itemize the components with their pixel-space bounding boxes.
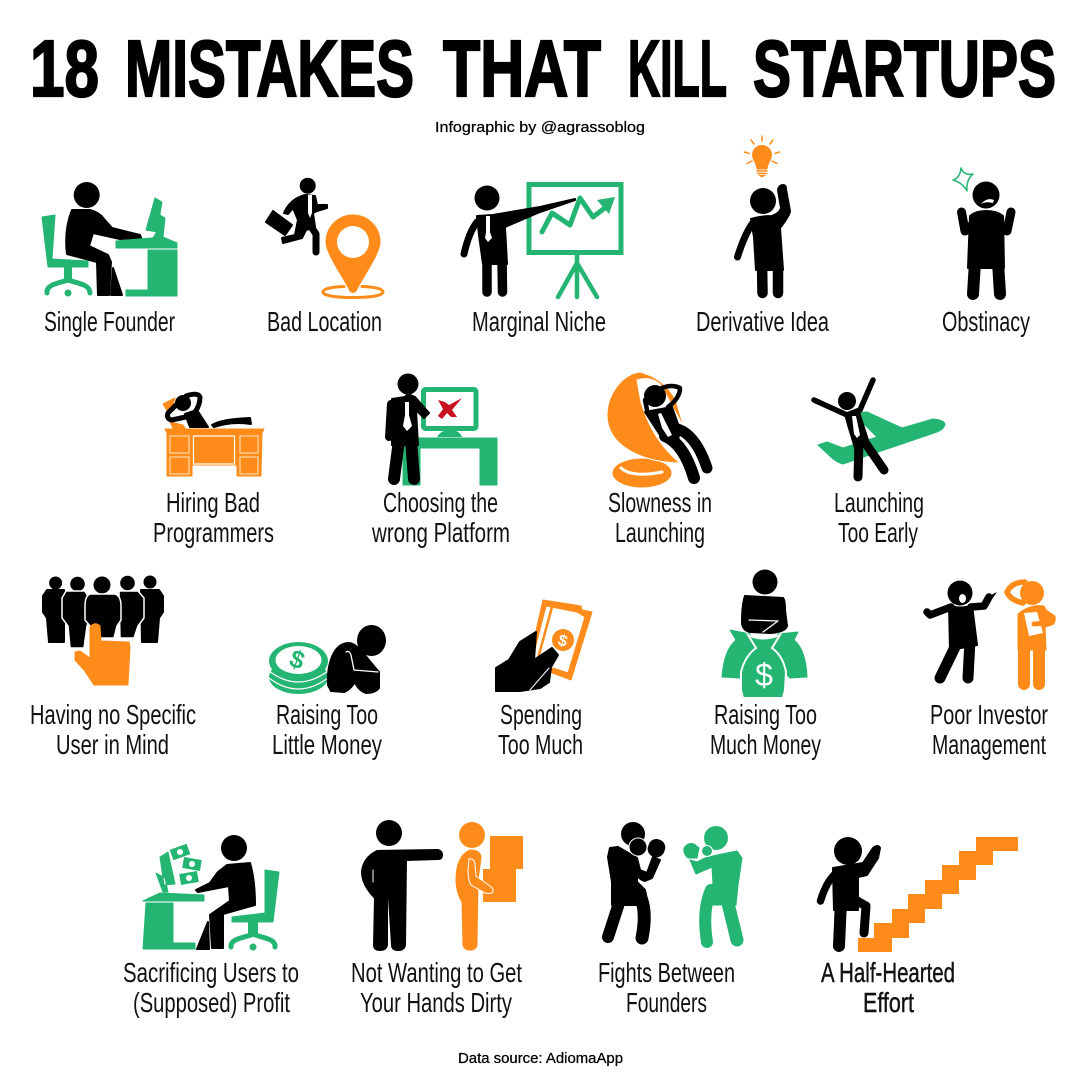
label: Your Hands Dirty (360, 987, 512, 1018)
item: Raising Too Much Money (710, 570, 821, 760)
label: Fights Between (598, 957, 735, 988)
label (351, 957, 522, 1018)
item: Hiring Bad Programmers (153, 394, 274, 548)
item: Bad Location (266, 178, 383, 337)
label (821, 957, 955, 1018)
label: (Supposed) Profit (133, 987, 290, 1018)
label: Not Wanting to Get (351, 957, 522, 988)
label: Launching (834, 487, 924, 518)
icon: man at screen with red cross (389, 374, 497, 485)
label: Too Much (498, 729, 583, 760)
label (153, 487, 274, 548)
label: Raising Too (714, 699, 817, 730)
label (30, 699, 196, 760)
label: Sacrificing Users to (123, 957, 299, 988)
item: Having no Specific User in Mind (30, 576, 196, 760)
label: wrong Platform (371, 517, 510, 548)
label: Choosing the (383, 487, 498, 518)
label: Marginal Niche (472, 306, 606, 337)
label: Programmers (153, 517, 274, 548)
item: Spending Too Much (496, 600, 592, 760)
item: Obstinacy (942, 168, 1030, 337)
item: Launching Too Early (814, 380, 945, 548)
item: Sacrificing Users to (Supposed) Profit (123, 835, 299, 1018)
title: 18 (30, 24, 99, 113)
label: Derivative Idea (696, 306, 829, 337)
icon: founder at desk (42, 182, 177, 296)
icon: man on money bags (722, 570, 807, 698)
icon: man at desk with cash (143, 835, 279, 950)
label: Single Founder (44, 306, 175, 337)
label: Raising Too (276, 699, 378, 730)
label: Launching (615, 517, 705, 548)
icon: stubborn man (953, 168, 1011, 294)
item: Poor Investor Management (927, 580, 1055, 760)
item: Marginal Niche (464, 184, 621, 337)
icon: investor argument (927, 580, 1055, 684)
item: Slowness in Launching (607, 372, 712, 548)
label: Spending (500, 699, 582, 730)
label (498, 699, 583, 760)
label (371, 487, 510, 548)
label (272, 699, 382, 760)
icon: man in egg chair (607, 372, 707, 488)
label (598, 957, 735, 1018)
item: Raising Too Little Money (269, 625, 386, 760)
subtitle: Infographic by @agrassoblog (435, 120, 645, 136)
icon: coins and sad man: $ (286, 644, 308, 676)
icon: presenter and chart board (464, 184, 621, 297)
icon: man climbing stairs (820, 837, 1018, 952)
icon: running man and pin (266, 178, 383, 298)
title: THAT (443, 24, 601, 113)
item: Single Founder (42, 182, 177, 337)
icon: man with lightbulb (738, 136, 790, 293)
label: Too Early (838, 517, 918, 548)
icon: crowd and pointing hand (43, 576, 163, 685)
label (123, 957, 299, 1018)
label (608, 487, 712, 548)
label: A Half-Hearted (821, 957, 955, 988)
label: Bad Location (267, 306, 382, 337)
label: Hiring Bad (166, 487, 260, 518)
item: Derivative Idea (696, 136, 829, 337)
label: Obstinacy (942, 306, 1030, 337)
icon: lazy man at desk (163, 394, 264, 476)
label: Having no Specific (30, 699, 196, 730)
source note: Data source: AdiomaApp (458, 1051, 623, 1067)
icon: man and airplane (814, 380, 945, 477)
title: KILL (628, 24, 727, 113)
label (834, 487, 924, 548)
icon: hand holding money: $ (556, 632, 569, 651)
label: Little Money (272, 729, 382, 760)
label: Much Money (710, 729, 821, 760)
item: Not Wanting to Get Your Hands Dirty (351, 820, 523, 1018)
icon: pointing man and box carrier (362, 820, 523, 950)
label: Founders (626, 987, 707, 1018)
label (710, 699, 821, 760)
title: MISTAKES (125, 24, 414, 113)
label (930, 699, 1048, 760)
icon: two boxing founders (608, 822, 742, 942)
item: Fights Between Founders (598, 822, 742, 1018)
label: Effort (863, 987, 914, 1018)
item: A Half-Hearted Effort (820, 837, 1018, 1018)
item: Choosing the wrong Platform (371, 374, 510, 548)
icon: man on money bags: $ (755, 657, 773, 693)
label: User in Mind (56, 729, 169, 760)
title (30, 24, 1056, 113)
icon: hand holding money (496, 600, 592, 691)
label: Slowness in (608, 487, 712, 518)
